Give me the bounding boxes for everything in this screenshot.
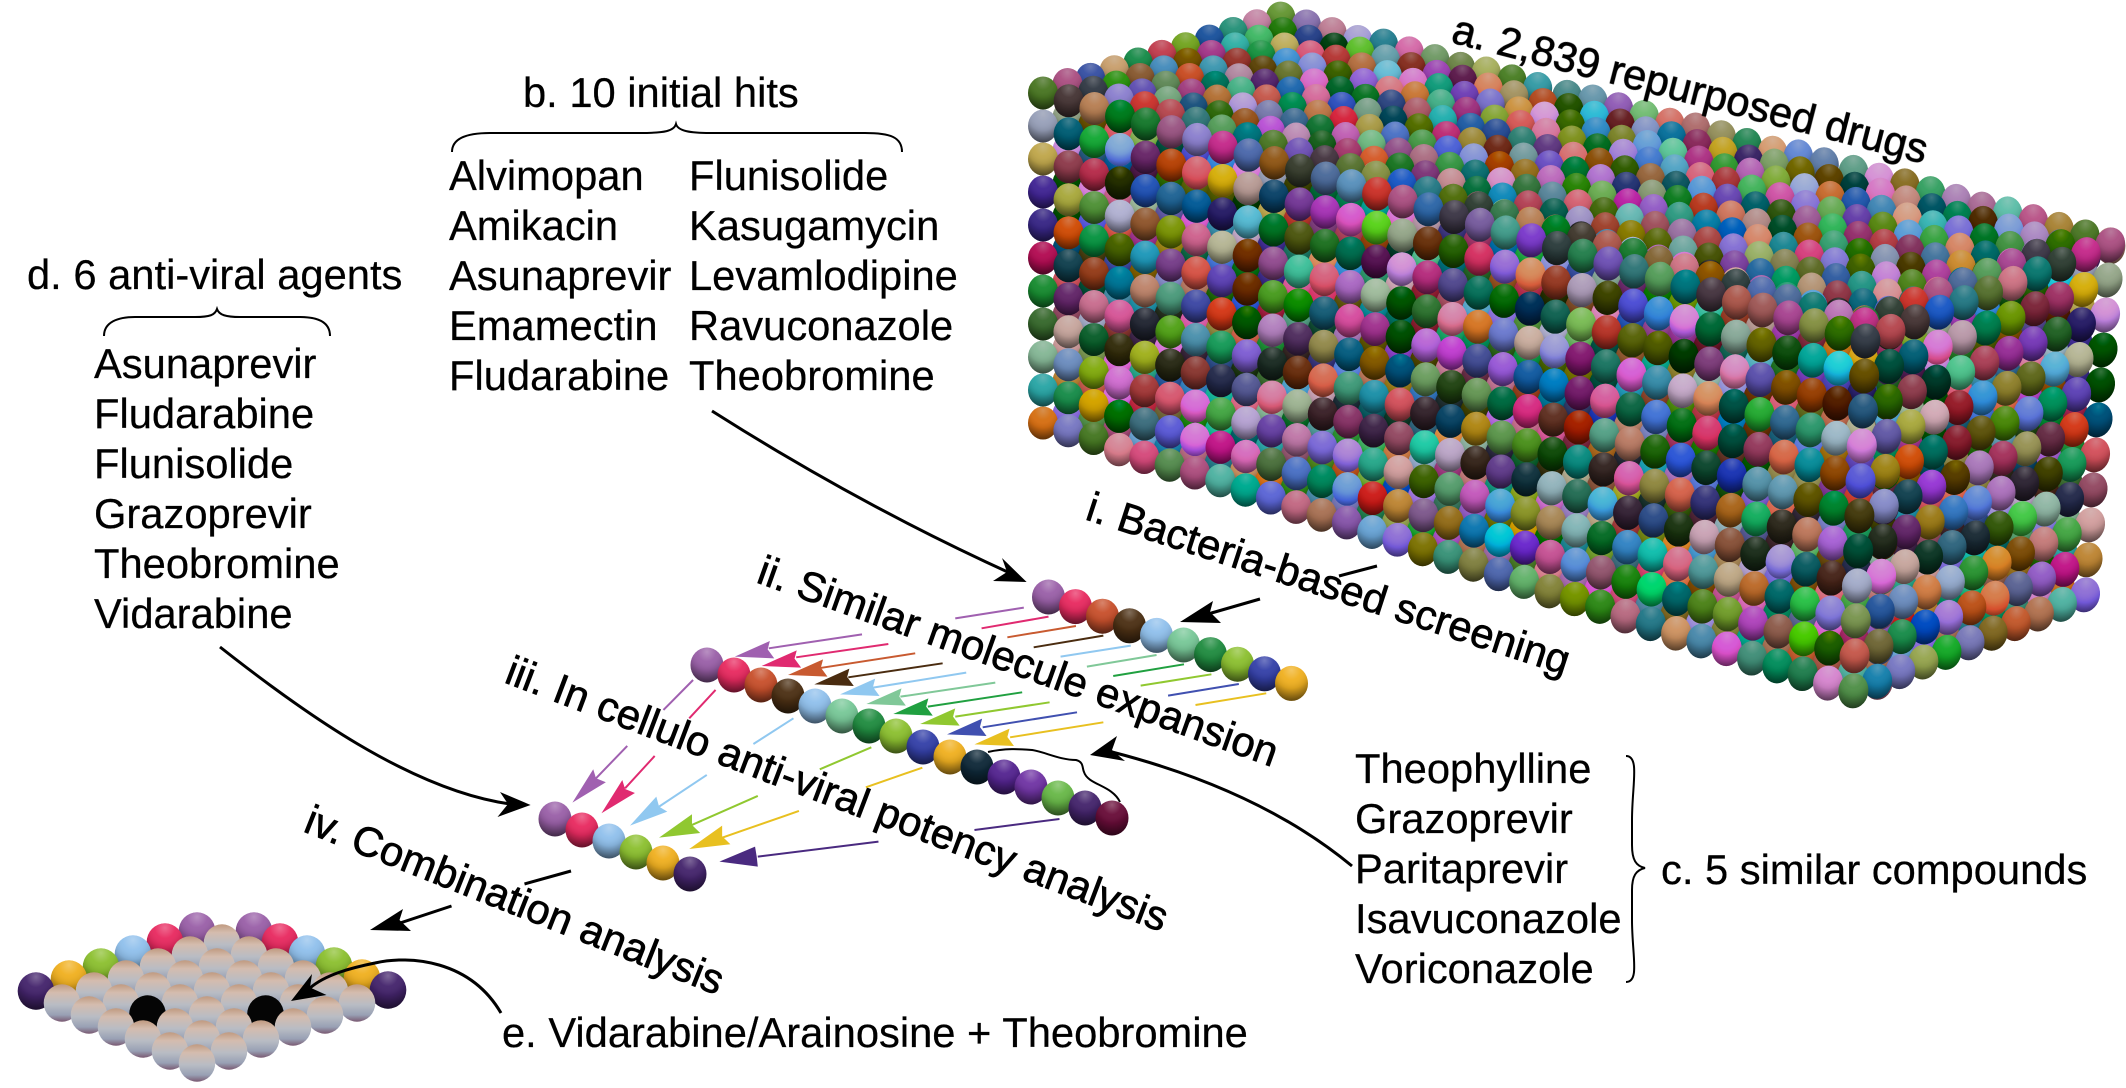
step label i: bacteria-based screening: i. Bacteria-based screening xyxy=(1081,483,1576,684)
sphere block: 2,839 repurposed drugs xyxy=(1028,2,2126,708)
list: 10 initial hits: Asunaprevir xyxy=(449,252,672,299)
brace beside similar compounds xyxy=(1626,756,1645,982)
list: 5 similar compounds: Voriconazole xyxy=(1355,945,1594,992)
brace over similar compound beads xyxy=(988,749,1120,802)
bead row: 10 initial hits xyxy=(1032,580,1308,701)
list: 10 initial hits: Flunisolide xyxy=(689,152,888,199)
step label iii: in cellulo anti-viral potency analysis: iii. In cellulo anti-viral potency analysis xyxy=(500,646,1175,941)
list: 5 similar compounds: Grazoprevir xyxy=(1355,795,1573,842)
list: 6 anti-viral agents xyxy=(94,340,340,637)
list: 10 initial hits: Alvimopan xyxy=(449,152,644,199)
step label iv: combination analysis: iv. Combination analysis xyxy=(299,796,731,1004)
list: 5 similar compounds: Theophylline xyxy=(1355,745,1591,792)
arrow: combination analysis xyxy=(370,871,571,931)
list: 10 initial hits: Theobromine xyxy=(689,352,935,399)
arrow: vidarabine plus theobromine to matrix xyxy=(291,960,501,1013)
colored arrows from second bead row to third xyxy=(572,680,1059,867)
arrow: similar compounds to second bead row xyxy=(1090,736,1352,866)
label a: 2,839 repurposed drugs: a. 2,839 repurposed drugs xyxy=(1448,5,1933,172)
list: 10 initial hits: Levamlodipine xyxy=(689,252,958,299)
list: 6 anti-viral agents: Asunaprevir xyxy=(94,340,317,387)
list: 10 initial hits: Kasugamycin xyxy=(689,202,939,249)
brace over anti-viral agents xyxy=(104,309,330,336)
list: 6 anti-viral agents: Vidarabine xyxy=(94,590,293,637)
block top face xyxy=(1028,2,2125,359)
list: 10 initial hits: Fludarabine xyxy=(449,352,669,399)
label c: 5 similar compounds: c. 5 similar compounds xyxy=(1661,846,2087,893)
label e: vidarabine combination: e. Vidarabine/Arainosine + Theobromine xyxy=(502,1009,1248,1056)
list: 10 initial hits: Emamectin xyxy=(449,302,658,349)
block right end face xyxy=(1861,228,2126,699)
heading d: 6 anti-viral agents: d. 6 anti-viral agents xyxy=(27,251,402,298)
combination matrix grid xyxy=(18,912,406,1082)
arrow: initial hits to first bead row xyxy=(712,411,1027,582)
list: 10 initial hits: Amikacin xyxy=(449,202,618,249)
block long front face xyxy=(1028,76,1881,708)
brace over initial hits xyxy=(452,124,902,152)
list: 6 anti-viral agents: Flunisolide xyxy=(94,440,293,487)
list: 5 similar compounds: Paritaprevir xyxy=(1355,845,1568,892)
list: 6 anti-viral agents: Grazoprevir xyxy=(94,490,312,537)
arrow: bacteria-based screening xyxy=(1180,566,1377,623)
arrow: anti-viral agents to third bead row xyxy=(220,647,531,817)
list: 6 anti-viral agents: Theobromine xyxy=(94,540,340,587)
inner sphere layer behind right face xyxy=(1836,220,2101,691)
colored arrows from first bead row to second xyxy=(735,608,1266,746)
list: 10 initial hits: Ravuconazole xyxy=(689,302,953,349)
bead row: 6 anti-viral agents xyxy=(538,802,706,892)
list: 5 similar compounds: Isavuconazole xyxy=(1355,895,1622,942)
matrix colored back edges xyxy=(18,912,406,1010)
list: 10 initial hits xyxy=(449,152,958,399)
matrix beige cells with two black hits xyxy=(44,924,375,1082)
step label ii: similar molecule expansion: ii. Similar molecule expansion xyxy=(752,546,1285,776)
bead row: hits plus similar compounds xyxy=(690,648,1128,836)
inner sphere layer behind front face xyxy=(1052,68,1906,700)
list: 5 similar compounds xyxy=(1355,745,1622,992)
heading b: 10 initial hits: b. 10 initial hits xyxy=(523,69,799,116)
list: 6 anti-viral agents: Fludarabine xyxy=(94,390,314,437)
